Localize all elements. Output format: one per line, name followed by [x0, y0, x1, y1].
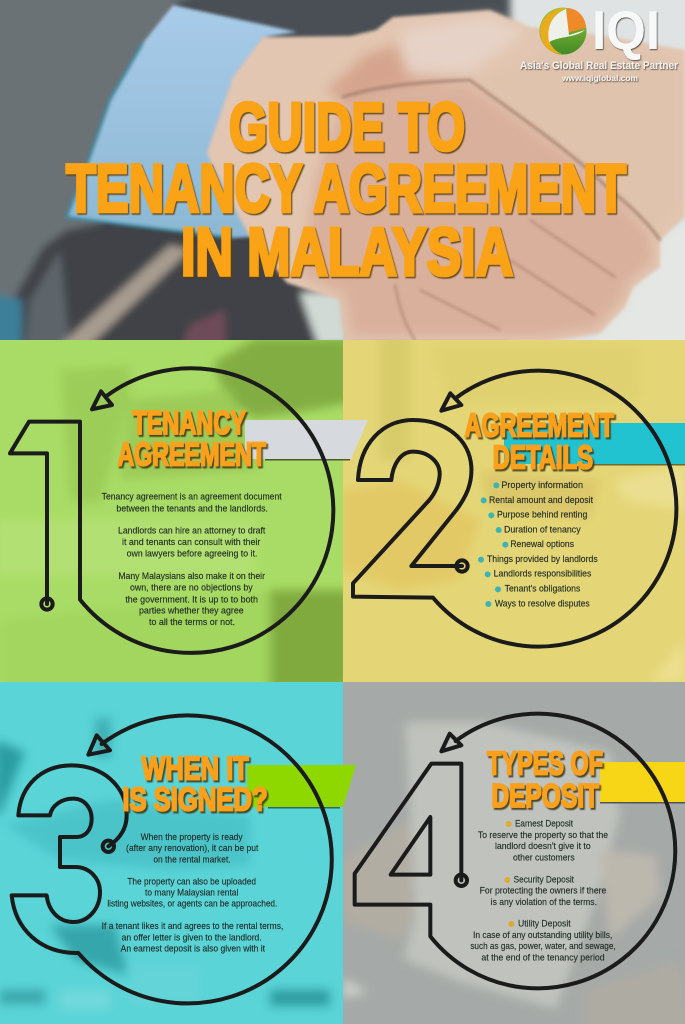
numeral 4 with circular arrow	[355, 714, 675, 988]
deposit descriptions: other customers	[513, 852, 575, 862]
logo wordmark: IQI	[592, 0, 660, 61]
body text: between the tenants and the landlords.	[116, 503, 268, 513]
panel 1: tenancy agreement	[10, 368, 333, 653]
body text	[102, 832, 283, 953]
heading: WHEN IT	[141, 750, 249, 787]
panel 3 background	[0, 682, 343, 1024]
heading: DEPOSIT	[491, 778, 599, 815]
heading: DETAILS	[493, 439, 593, 476]
title: GUIDE TO	[229, 89, 465, 165]
body text: Tenancy agreement is an agreement document	[102, 492, 282, 502]
body text: an offer letter is given to the landlord.	[122, 932, 262, 942]
bullet list: Landlords responsibilities	[494, 569, 592, 579]
body text: (after any renovation), it can be put	[126, 843, 259, 853]
panel 1 background	[0, 338, 350, 690]
bullet list: Ways to resolve disputes	[495, 598, 590, 608]
heading	[117, 405, 266, 474]
body text: own lawyers before agreeing to it.	[127, 548, 257, 558]
deposit descriptions	[470, 819, 616, 962]
deposit descriptions: To reserve the property so that the	[478, 830, 608, 840]
bullet list: Things provided by landlords	[487, 554, 598, 564]
body text: listing websites, or agents can be approached.	[107, 899, 277, 909]
icon: IQI swirl	[540, 8, 586, 54]
heading	[122, 750, 268, 818]
heading: TYPES OF	[487, 745, 603, 782]
deposit descriptions: at the end of the tenancy period	[481, 952, 605, 962]
bullet list: Renewal options	[510, 539, 574, 549]
body text: own, there are no objections by	[130, 583, 253, 593]
heading	[464, 407, 614, 476]
heading: AGREEMENT	[464, 407, 614, 444]
panel 3: when it is signed	[12, 715, 332, 1003]
banner: panel 1	[245, 420, 368, 460]
body text: parties whether they agree	[139, 606, 244, 616]
numeral 2 with circular arrow	[353, 371, 676, 647]
deposit descriptions: landlord doesn't give it to	[495, 841, 591, 851]
bullet list	[478, 480, 598, 608]
body text: If a tenant likes it and agrees to the rental terms,	[102, 921, 283, 931]
panel 4: types of deposit	[355, 714, 675, 988]
deposit descriptions: For protecting the owners if there	[480, 885, 606, 895]
title	[66, 89, 626, 290]
deposit descriptions: Security Deposit	[514, 874, 574, 884]
banner: panel 2	[504, 423, 685, 466]
body text: the government. It is up to to both	[125, 594, 258, 604]
body text: Many Malaysians also make it on their	[118, 571, 265, 581]
numeral 1 with circular arrow	[10, 368, 333, 653]
body text: it and tenants can consult with their	[122, 537, 260, 547]
deposit descriptions: Earnest Deposit	[515, 819, 573, 829]
body text: The property can also be uploaded	[127, 876, 256, 886]
panel 2 background	[340, 335, 685, 682]
body text: on the rental market.	[153, 854, 231, 864]
deposit descriptions: such as gas, power, water, and sewage,	[470, 941, 616, 951]
panel 4 background	[343, 682, 685, 1024]
title: IN MALAYSIA	[181, 214, 513, 290]
heading	[487, 745, 603, 815]
panel 2: agreement details	[353, 371, 676, 647]
heading: AGREEMENT	[117, 437, 266, 474]
logo	[520, 0, 679, 83]
heading: IS SIGNED?	[122, 781, 268, 818]
panel: hero handshake photo	[0, 0, 685, 350]
body text: When the property is ready	[141, 832, 243, 842]
body text	[102, 492, 282, 627]
body text: to all the terms or not.	[149, 617, 235, 627]
banner: panel 4	[600, 762, 685, 804]
bullet list: Property information	[501, 480, 583, 490]
deposit descriptions: Utility Deposit	[518, 919, 571, 929]
banner: panel 3	[247, 765, 356, 808]
bullet list: Duration of tenancy	[504, 524, 581, 534]
bullet list: Rental amount and deposit	[489, 495, 593, 505]
bullet list: Purpose behind renting	[497, 510, 587, 520]
body text: to many Malaysian rental	[145, 888, 238, 898]
body text: An earnest deposit is also given with it	[121, 943, 265, 953]
heading: TENANCY	[132, 405, 246, 442]
website: www.iqiglobal.com	[561, 73, 638, 83]
deposit descriptions: is any violation of the terms.	[491, 897, 597, 907]
bullet list: Tenant's obligations	[505, 584, 581, 594]
numeral 3 with circular arrow	[12, 715, 332, 1003]
deposit descriptions: In case of any outstanding utility bills,	[473, 930, 612, 940]
body text: Landlords can hire an attorney to draft	[118, 526, 266, 536]
